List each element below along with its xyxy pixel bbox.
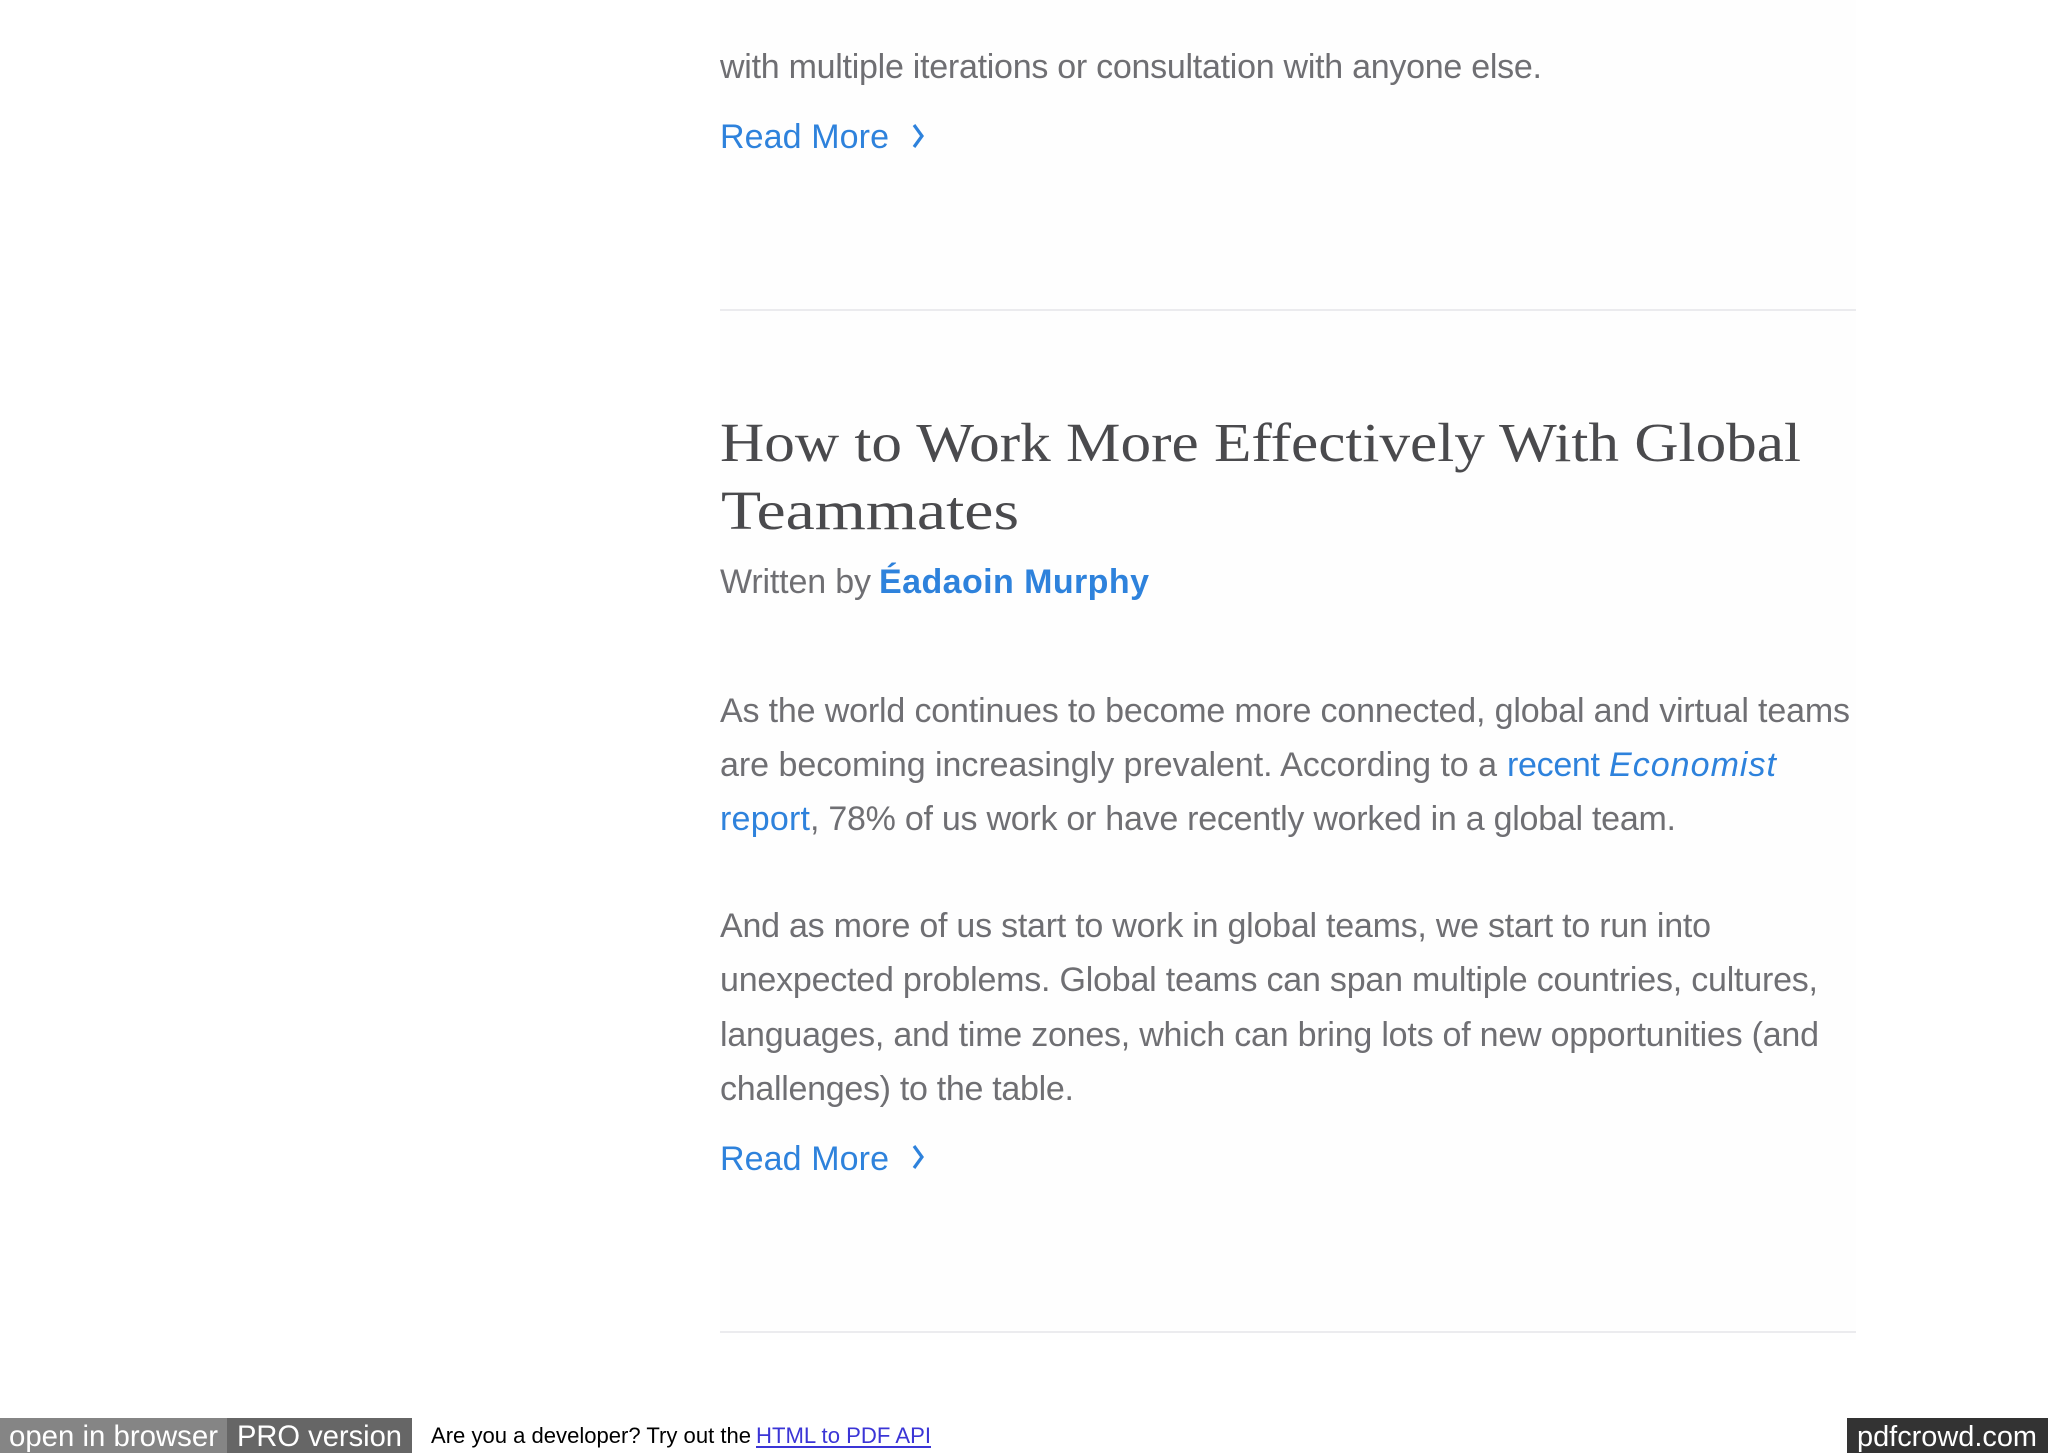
- footer: open in browser button: open in browser: [9, 1420, 218, 1453]
- read more link: this article: Read More: [720, 1140, 889, 1178]
- footer: pro version button: PRO version: [237, 1420, 402, 1453]
- read more link: previous article: Read More: [720, 118, 889, 156]
- paragraph one: are becoming increasingly prevalent. According to a: [720, 746, 1497, 784]
- paragraph one: report: [720, 800, 811, 838]
- byline: Éadaoin Murphy: [879, 563, 1149, 601]
- paragraph one: As the world continues to become more connected, global and virtual teams: [720, 692, 1850, 730]
- paragraph two: languages, and time zones, which can bring lots of new opportunities (and: [720, 1016, 1819, 1054]
- previous article closing text: with multiple iterations or consultation with anyone else.: [719, 48, 1542, 86]
- article title: [720, 412, 1801, 541]
- paragraph one: recent: [1507, 746, 1601, 784]
- paragraph one: [720, 692, 1850, 838]
- paragraph one: , 78% of us work or have recently worked in a global team.: [810, 800, 1676, 838]
- footer: developer message: [431, 1423, 931, 1448]
- paragraph one: Economist: [1609, 746, 1778, 784]
- paragraph two: [720, 907, 1819, 1108]
- byline: [720, 563, 1149, 601]
- paragraph two: And as more of us start to work in global teams, we start to run into: [720, 907, 1711, 945]
- article title: Teammates: [721, 480, 1019, 541]
- footer: developer message: HTML to PDF API: [756, 1423, 931, 1448]
- paragraph two: challenges) to the table.: [720, 1070, 1074, 1108]
- article title: How to Work More Effectively With Global: [720, 412, 1801, 473]
- byline: Written by: [720, 563, 871, 601]
- footer: developer message: Are you a developer? Try out the: [431, 1423, 751, 1448]
- paragraph two: unexpected problems. Global teams can span multiple countries, cultures,: [720, 961, 1818, 999]
- footer: pdfcrowd badge: pdfcrowd.com: [1857, 1421, 2037, 1453]
